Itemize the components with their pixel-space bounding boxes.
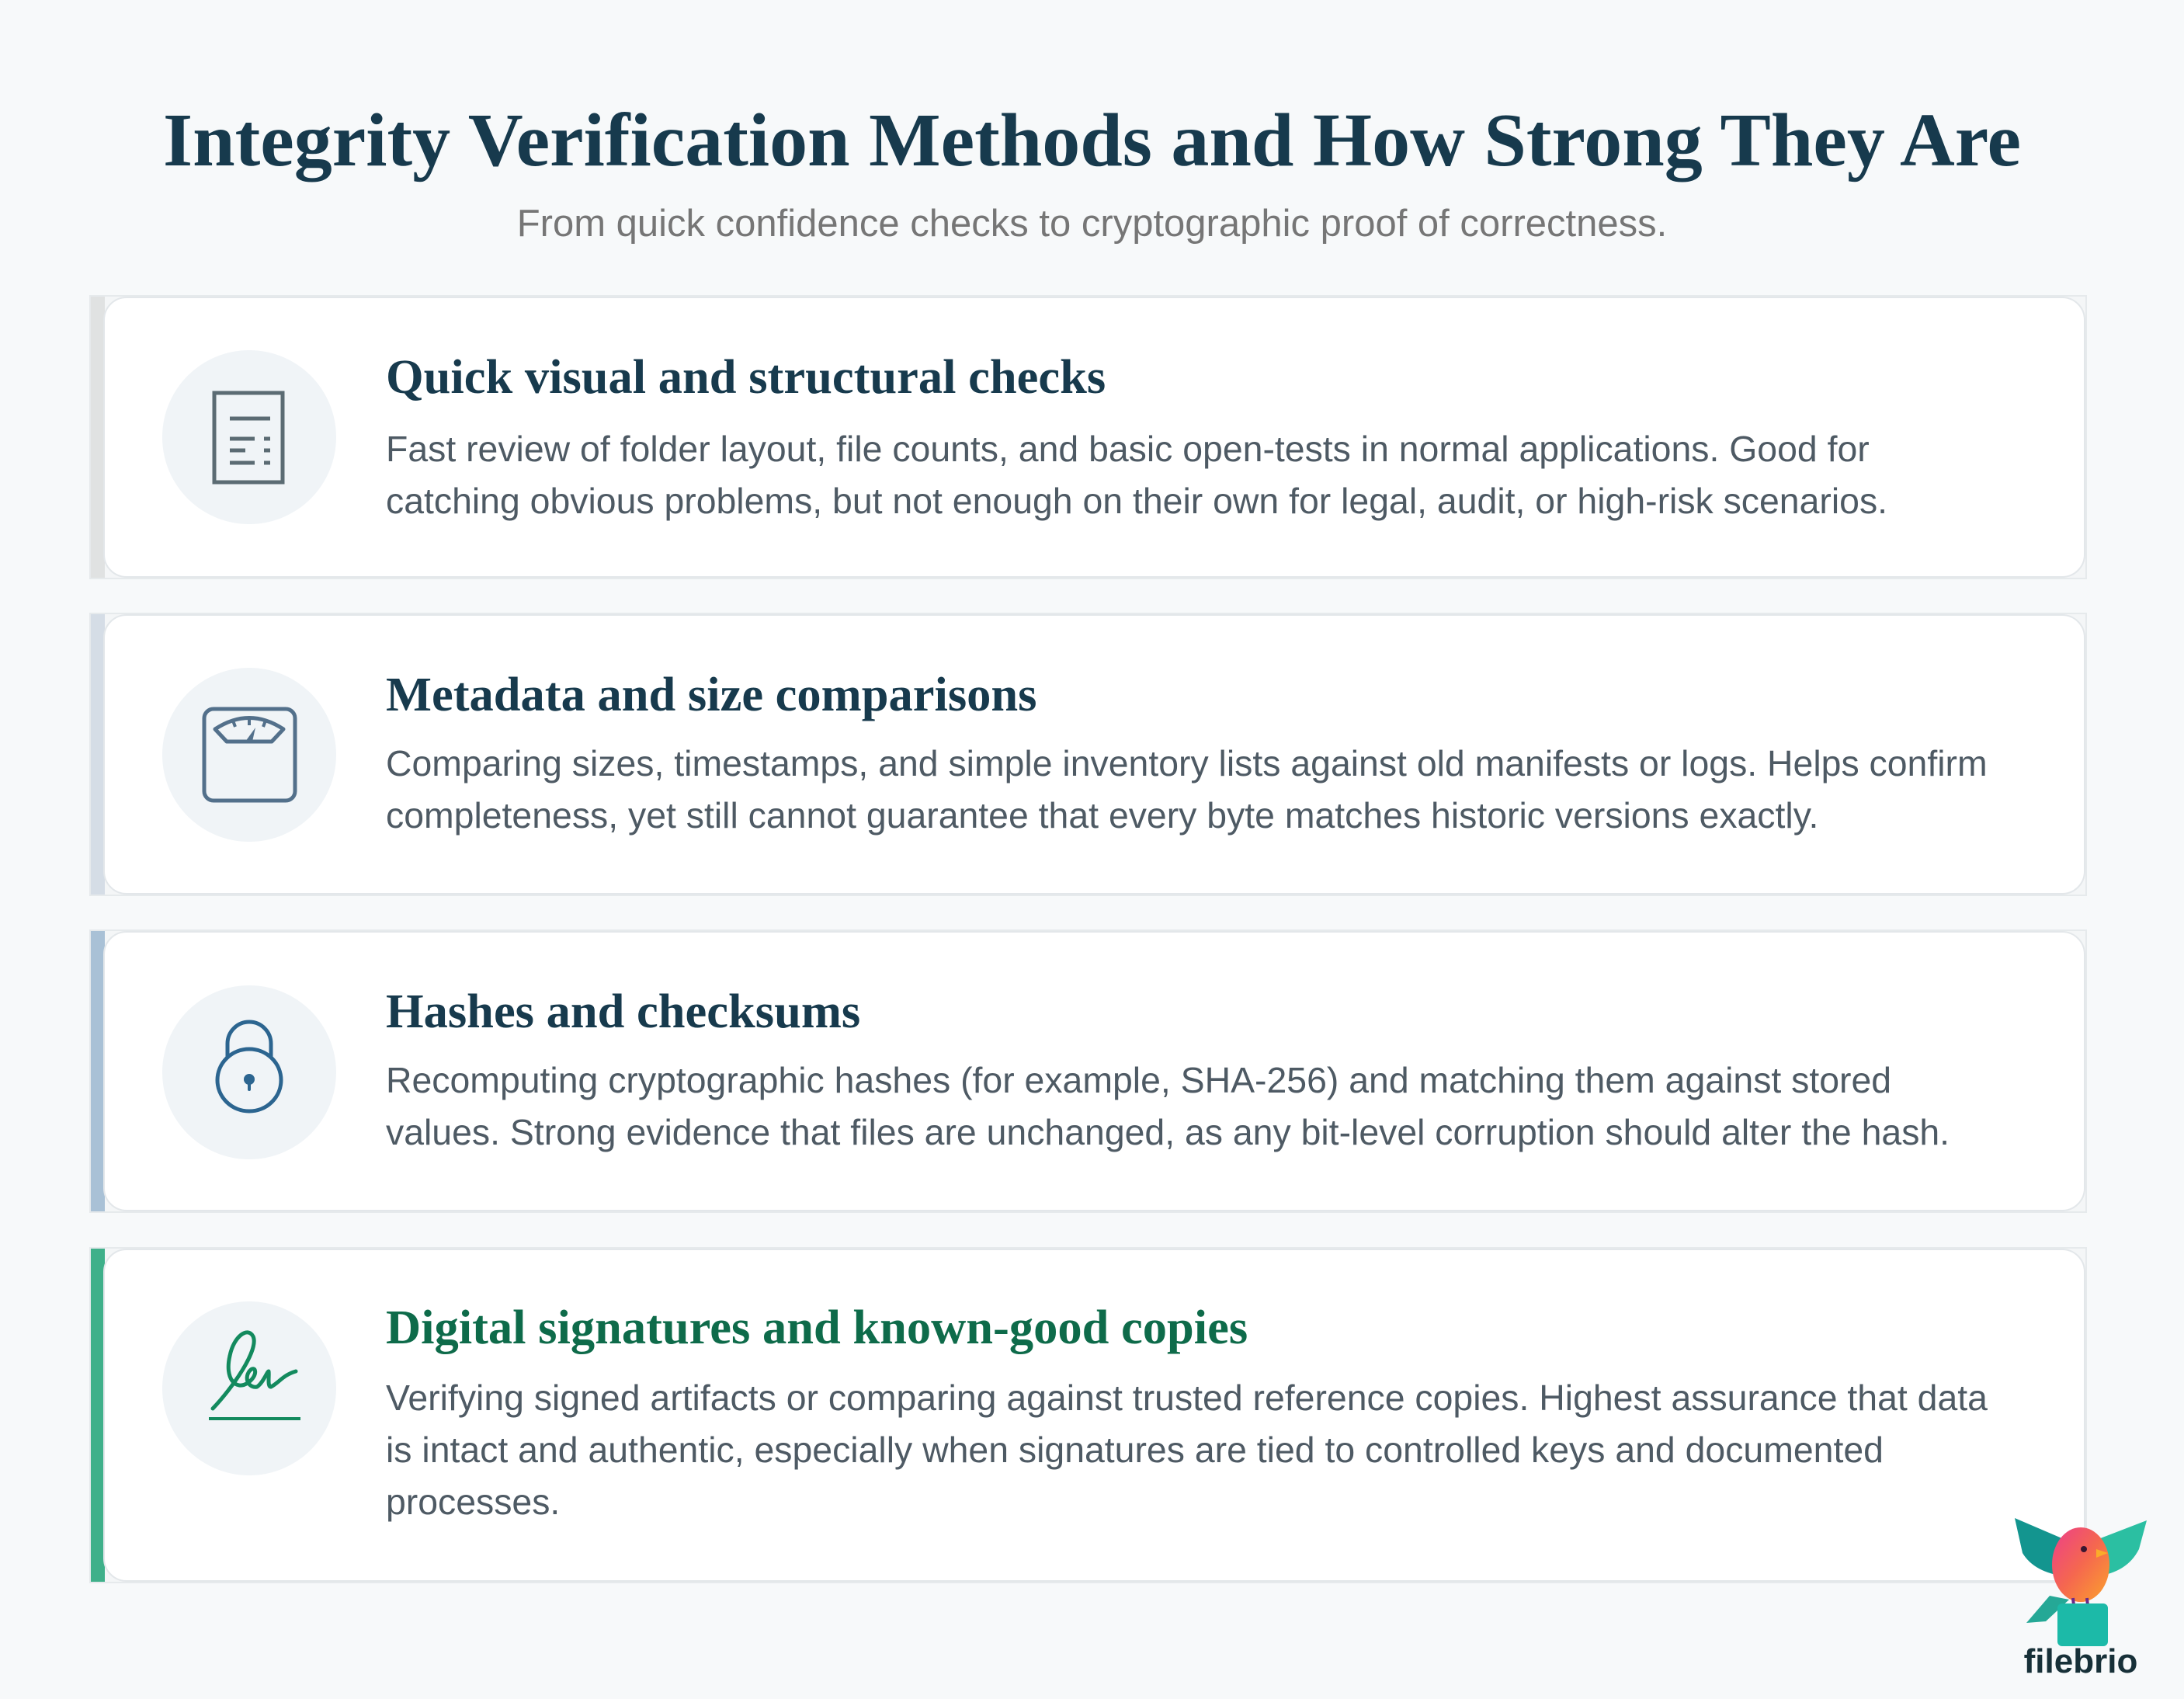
text bbox=[386, 1378, 1988, 1522]
panel: quick visual checks bbox=[89, 295, 2087, 579]
panel: hashes bbox=[89, 929, 2087, 1213]
heading: Metadata and size comparisons bbox=[386, 667, 1037, 721]
panel: metadata bbox=[89, 613, 2087, 896]
panel: digital signatures bbox=[89, 1247, 2087, 1583]
icon: lock bbox=[162, 985, 336, 1159]
text: Comparing sizes, timestamps, and simple inventory lists against old manifests or logs. Helps confirm bbox=[386, 743, 1988, 783]
text: is intact and authentic, especially when signatures are tied to controlled keys and documented bbox=[386, 1430, 1884, 1470]
text: values. Strong evidence that files are unchanged, as any bit-level corruption should alter the hash. bbox=[386, 1112, 1950, 1152]
logo: filebrio bbox=[2015, 1518, 2147, 1680]
heading: Hashes and checksums bbox=[386, 984, 860, 1038]
icon: signature bbox=[162, 1301, 336, 1475]
text: Recomputing cryptographic hashes (for example, SHA-256) and matching them against stored bbox=[386, 1060, 1891, 1100]
text bbox=[386, 429, 1887, 521]
title: Integrity Verification Methods and How Strong They Are bbox=[163, 99, 2021, 182]
heading: Quick visual and structural checks bbox=[386, 349, 1106, 404]
icon: scale bbox=[162, 668, 336, 842]
text: Fast review of folder layout, file counts, and basic open-tests in normal applications. Good for bbox=[386, 429, 1870, 469]
text: completeness, yet still cannot guarantee that every byte matches historic versions exactly. bbox=[386, 795, 1818, 836]
text bbox=[386, 743, 1988, 836]
logo: filebrio: filebrio bbox=[2024, 1642, 2137, 1680]
text: Verifying signed artifacts or comparing against trusted reference copies. Highest assurance that data bbox=[386, 1378, 1988, 1418]
text bbox=[386, 1060, 1950, 1152]
heading: Digital signatures and known-good copies bbox=[386, 1300, 1248, 1354]
text: processes. bbox=[386, 1482, 560, 1522]
text: catching obvious problems, but not enough on their own for legal, audit, or high-risk scenarios. bbox=[386, 481, 1887, 521]
subtitle: From quick confidence checks to cryptographic proof of correctness. bbox=[517, 203, 1667, 245]
icon: document bbox=[162, 350, 336, 524]
